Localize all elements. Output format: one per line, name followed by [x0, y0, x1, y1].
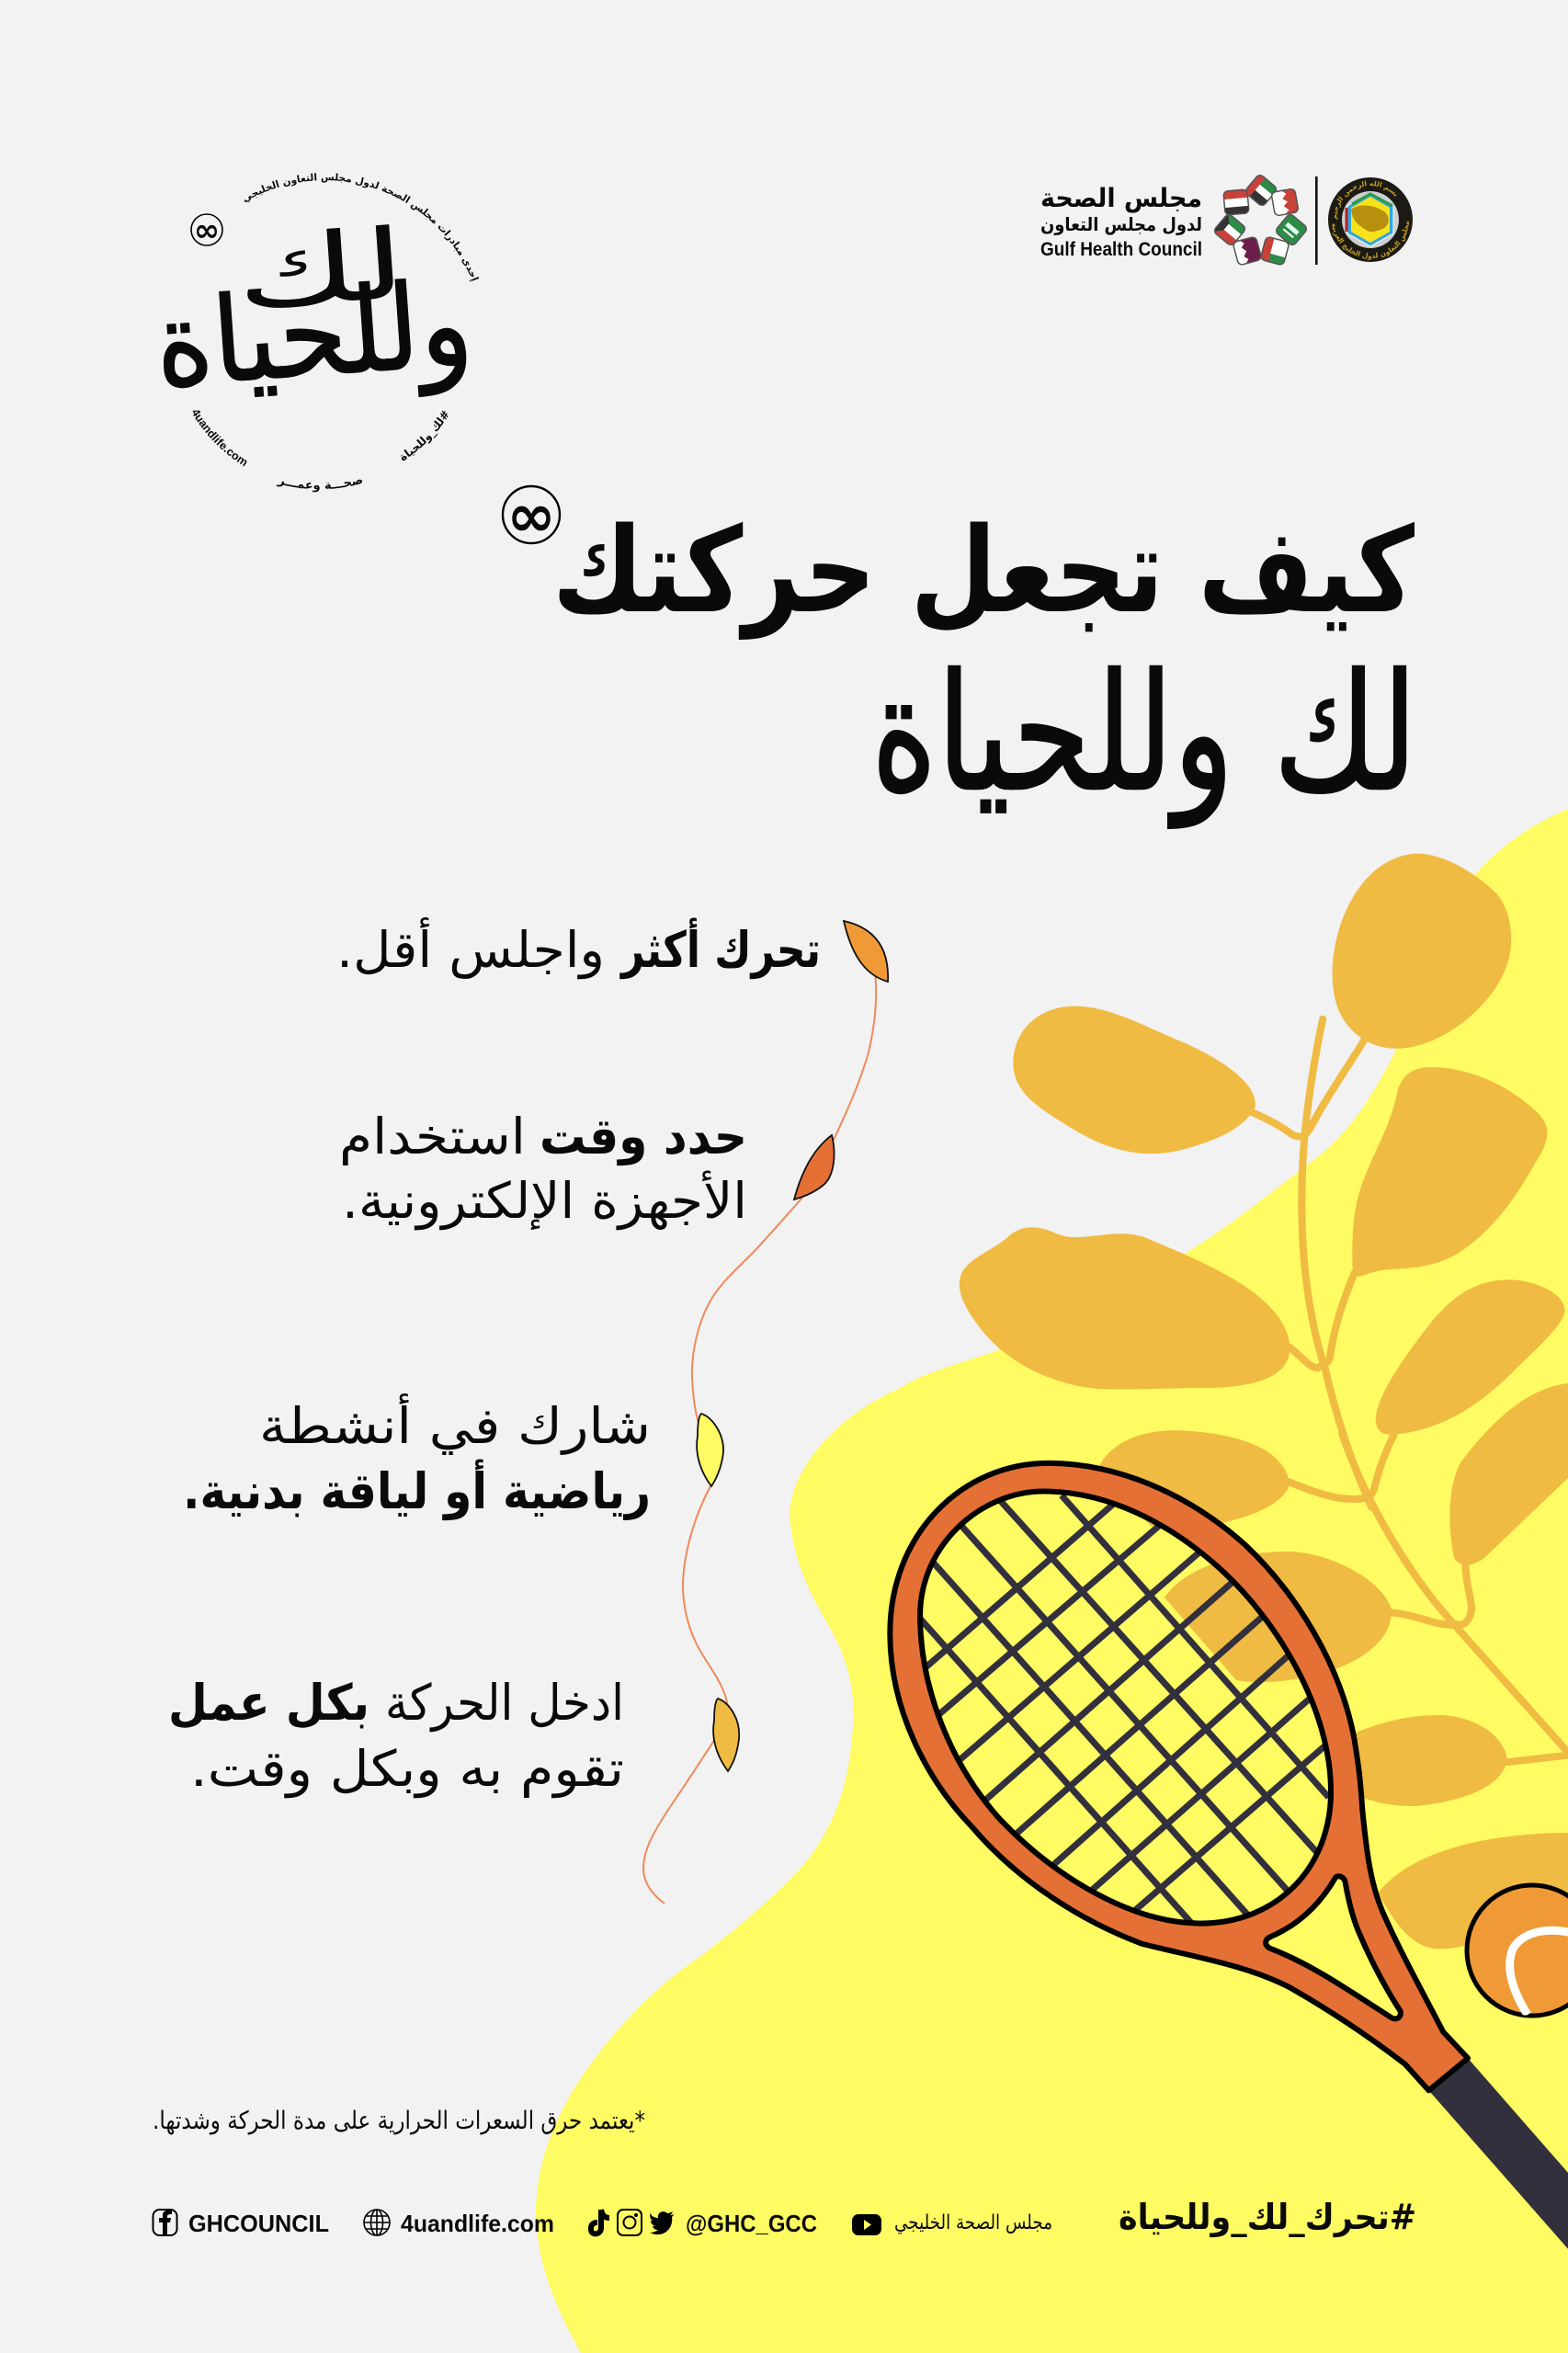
racket frame [890, 1463, 1468, 2090]
organisation logos [1040, 175, 1413, 265]
logo name text: Gulf Health Council [1040, 239, 1202, 260]
campaign logo ring text: ‏#لك_وللحياة [401, 410, 449, 461]
facebook handle: GHCOUNCIL [188, 2210, 329, 2237]
campaign logo wordmark: لك [232, 208, 410, 332]
list item three: رياضية أو لياقة بدنية. [183, 1459, 651, 1520]
icon: youtube [852, 2214, 881, 2235]
list item four: تقوم به وبكل وقت. [190, 1740, 624, 1798]
trail line [643, 972, 876, 1904]
trail leaf 1 [844, 921, 888, 982]
gulf cooperation council emblem: مجلس التعاون لدول الخليج العربية [1331, 221, 1410, 260]
plant leaves lower [1165, 1383, 1568, 1949]
icon: facebook [153, 2210, 176, 2235]
trail leaf 3 [697, 1414, 723, 1486]
plant lower stems [1342, 1434, 1568, 1762]
list item one [336, 917, 821, 979]
trail leaf 2 [794, 1135, 835, 1199]
list item three: شارك في أنشطة [259, 1393, 651, 1455]
plant leaves upper [960, 853, 1565, 1529]
footer contact row [153, 2197, 1416, 2238]
list item two [339, 1108, 747, 1230]
flag star logo [1213, 174, 1308, 266]
list item two: استخدام [339, 1108, 526, 1165]
website: 4uandlife.com [401, 2210, 554, 2237]
title line one: كيف تجعل حركتك [552, 503, 1415, 640]
plant illustration [960, 853, 1568, 1949]
campaign logo [151, 173, 480, 493]
leaf trail [643, 921, 888, 1904]
tennis ball [1467, 1885, 1568, 2016]
gulf cooperation council emblem [1328, 177, 1413, 262]
title line two: لك وللحياة [871, 641, 1417, 828]
hashtag: #تحرك_لك_وللحياة [1119, 2197, 1416, 2238]
icon: twitter [650, 2211, 674, 2234]
title [503, 483, 1417, 828]
icon: tiktok [591, 2210, 609, 2234]
tennis racket [890, 1463, 1568, 2250]
yellow blob [536, 809, 1568, 2353]
list item three [183, 1393, 651, 1520]
list item two: حدد وقت [540, 1108, 747, 1165]
list item two: الأجهزة الإلكترونية. [342, 1170, 747, 1230]
plant stems [1251, 1019, 1394, 1507]
list item four: ادخل الحركة [385, 1674, 624, 1732]
campaign logo ring text: 4uandlife.com [193, 410, 246, 467]
gulf cooperation council emblem: بسم الله الرحمن الرحيم [1335, 180, 1397, 220]
icon: instagram [618, 2210, 642, 2235]
trail leaf 4 [713, 1699, 739, 1771]
campaign logo infinity badge: ∞ [194, 212, 220, 249]
campaign logo wordmark: وللحياة [151, 256, 477, 415]
list item one: تحرك أكثر [619, 917, 821, 979]
racket strings [920, 1495, 1329, 1924]
list item four: بكل عمل [168, 1674, 369, 1732]
racket handle [1429, 2058, 1568, 2250]
footnote: *يعتمد حرق السعرات الحرارية على مدة الحركة وشدتها. [153, 2107, 645, 2135]
logo name text [1040, 183, 1202, 260]
social handle: @GHC_GCC [686, 2210, 817, 2237]
campaign logo ring text: صحـــة وعمـــر [276, 480, 362, 493]
icon: globe [364, 2210, 390, 2235]
logo name text: لدول مجلس التعاون [1040, 213, 1202, 235]
youtube channel: مجلس الصحة الخليجي [894, 2211, 1052, 2234]
campaign logo ring text [193, 173, 480, 493]
logo divider [1315, 176, 1318, 265]
campaign logo ring text: إحدى مبادرات مجلس الصحة لدول مجلس التعاون الخليجي [244, 173, 480, 282]
logo name text: مجلس الصحة [1040, 183, 1202, 213]
title infinity badge: ∞ [506, 483, 556, 551]
list item one: واجلس أقل. [336, 917, 605, 979]
list item four [168, 1674, 624, 1798]
